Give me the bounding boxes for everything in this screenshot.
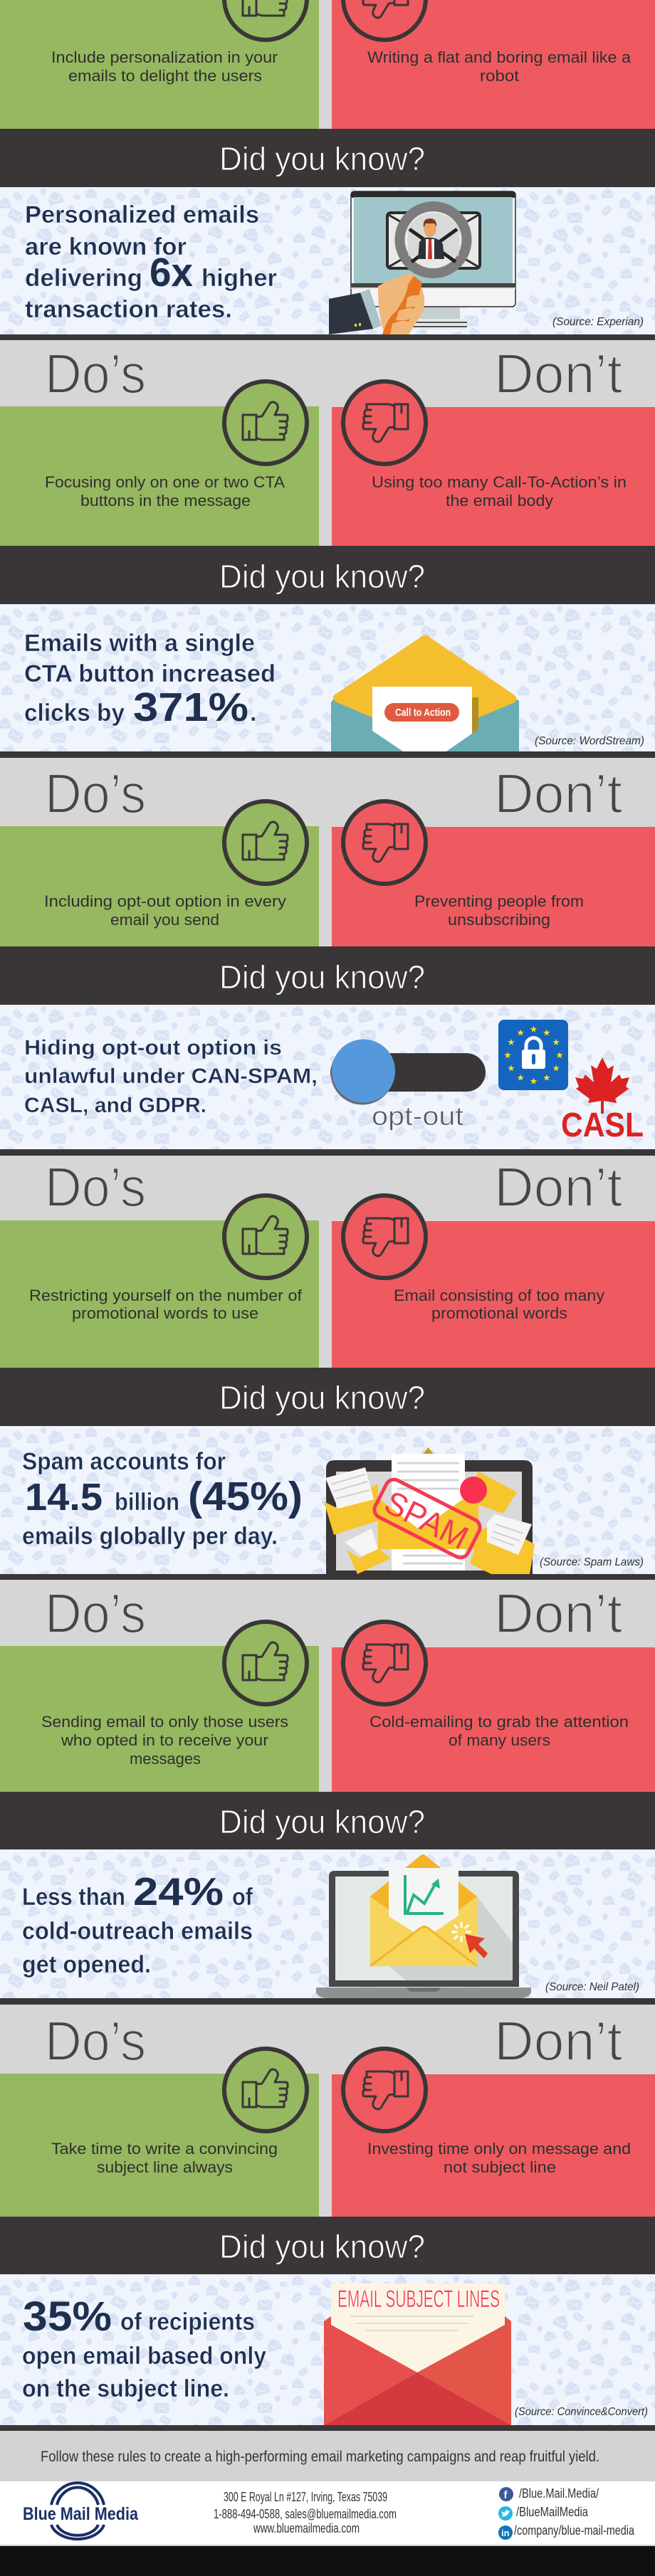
heading: do's: Do’s [45,1156,146,1218]
fact text: get opened. [22,1951,151,1978]
divider strip [0,751,655,758]
don't text [367,2140,631,2176]
icon: thumbs down [343,1195,426,1278]
fact text: Personalized emails [25,201,259,228]
don't text: robot [480,67,519,85]
heading bar: did you know 6: Did you know? [219,2228,425,2265]
icon: thumbs up [224,2049,307,2131]
heading bar: did you know 5 [0,1792,655,1849]
do text [45,473,285,510]
source: (Source: Experian) [552,316,644,328]
heading bar: did you know 5: Did you know? [219,1803,425,1840]
fact text: billion [115,1489,179,1516]
fact text: 371% [133,685,248,730]
divider strip [0,2425,655,2431]
fact text [22,1448,303,1550]
panel: personalized emails fact [0,187,655,334]
illustration: laptop with open envelope [316,1854,531,1998]
don't text: Email consisting of too many [394,1287,604,1304]
fact text: 14.5 [25,1476,103,1519]
social: linkedin: in [501,2528,510,2538]
fact text: 35% [23,2293,112,2340]
contact details: www.bluemailmedia.com [253,2521,360,2535]
heading: don't: Don’t [494,1156,622,1218]
fact text: clicks by [24,700,125,727]
icon: thumbs down [343,2049,426,2131]
fact text: on the subject line. [22,2375,229,2402]
heading bar: did you know 1: Did you know? [219,140,425,177]
icon: thumbs down [343,381,426,464]
fact text [25,201,277,323]
illustration: monitor with magnifier [329,191,515,334]
icon: thumbs up [224,1622,307,1704]
heading: do's: Do’s [45,342,146,405]
don't text [414,892,584,929]
do text: Including opt-out option in every [44,892,286,910]
fact text: of recipients [120,2308,255,2335]
divider strip [0,1149,655,1156]
logo: Blue Mail Media [23,2483,139,2539]
illustration: red envelope with subject lines [324,2284,511,2425]
panel: do's and don'ts 2 [0,758,655,946]
divider strip [0,1574,655,1580]
heading bar: did you know 4: Did you know? [219,1379,425,1416]
do text [51,48,278,85]
do text: Restricting yourself on the number of [29,1287,303,1304]
fact text: higher [201,265,277,292]
do text: Include personalization in your [51,48,278,66]
fact text: CASL, and GDPR. [24,1094,206,1117]
don't text: Writing a flat and boring email like a [367,48,632,66]
panel: do's and don'ts 5 [0,2005,655,2217]
don't text [370,1713,629,1749]
heading: do's: Do’s [45,762,146,825]
contact details: 300 E Royal Ln #127, Irving, Texas 75039 [224,2490,387,2504]
heading bar: did you know 3 [0,946,655,1005]
do text [41,1713,288,1768]
heading bar: did you know 2: Did you know? [219,558,425,595]
social: facebook: f [504,2489,508,2501]
icon: EU lock [498,1020,568,1090]
fact text: Spam accounts for [22,1448,226,1475]
panel: spam fact [0,1426,655,1574]
don't text [367,48,632,85]
panel: do's and don'ts 1 [0,340,655,546]
button: call to action [384,703,459,722]
don't text: Preventing people from [414,892,584,910]
social: facebook: /Blue.Mail.Media/ [519,2486,599,2501]
do text [29,1287,303,1322]
heading bar: did you know 2 [0,546,655,604]
heading: don't: Don’t [494,1582,622,1645]
fact text: of [232,1884,253,1911]
social: twitter [498,2505,589,2520]
do text: emails to delight the users [68,67,262,85]
fact text: Less than [22,1884,125,1911]
fact text: emails globally per day. [22,1523,278,1550]
icon: thumbs up [224,381,307,464]
heading: do's: Do’s [45,1582,146,1645]
panel: do's and don'ts 4 [0,1580,655,1792]
panel: subject line fact [0,2274,655,2425]
icon: toggle switch [330,1039,486,1104]
fact text: 6x [150,250,193,295]
fact text: CTA button increased [24,660,276,687]
social: twitter: /BlueMailMedia [516,2505,589,2519]
panel: opt-out fact [0,1005,655,1149]
fact text: open email based only [22,2343,266,2370]
fact text [22,2293,266,2402]
panel: do's and don'ts 3 [0,1156,655,1368]
divider strip [0,334,655,340]
fact text: cold-outreach emails [22,1918,253,1945]
don't text: of many users [449,1731,550,1749]
do text: buttons in the message [80,492,251,510]
social: facebook [499,2486,599,2501]
heading: don't: Don’t [494,2010,622,2072]
fact text: 24% [133,1869,224,1913]
don't text: Using too many Call-To-Action’s in [372,473,627,491]
don't text: Cold-emailing to grab the attention [370,1713,629,1731]
do text: messages [130,1750,201,1768]
heading bar: did you know 1 [0,129,655,187]
source: (Source: WordStream) [535,735,644,747]
icon: CASL maple leaf [561,1057,644,1144]
fact text: transaction rates. [25,296,232,323]
social: linkedin [498,2523,635,2540]
don't text [372,473,627,510]
do text: who opted in to receive your [61,1731,268,1749]
fact text: unlawful under CAN-SPAM, [24,1065,318,1088]
do text: Sending email to only those users [41,1713,288,1731]
fact text: Hiding opt-out option is [24,1036,282,1060]
icon: thumbs down [343,1622,426,1704]
panel: single CTA fact [0,604,655,751]
don't text: unsubscribing [448,911,550,929]
source: (Source: Spam Laws) [540,1556,644,1568]
panel: footer [0,2481,655,2546]
fact text: delivering [25,265,142,292]
don't text: Investing time only on message and [367,2140,631,2158]
panel: cold outreach fact [0,1849,655,1998]
icon: CASL maple leaf: CASL [561,1107,644,1144]
icon: thumbs up [224,801,307,884]
don't text: not subject line [444,2158,556,2176]
heading: do's: Do’s [45,2010,146,2072]
do text: Focusing only on one or two CTA [45,473,285,491]
logo: Blue Mail Media: Blue Mail Media [23,2504,139,2524]
heading bar: did you know 6 [0,2217,655,2274]
icon: thumbs down [343,0,426,40]
illustration: laptop with spam envelopes [324,1447,535,1574]
label: opt-out: opt-out [372,1102,464,1131]
fact text: (45%) [188,1474,303,1519]
do text [51,2140,278,2176]
icon: thumbs up [224,1195,307,1278]
don't text: promotional words [431,1304,567,1322]
panel: do's and don'ts 0 (cropped top) [0,0,655,129]
source: (Source: Neil Patel) [545,1981,639,1993]
stamp: SPAM: SPAM [379,1483,474,1556]
do text: promotional words to use [72,1304,258,1322]
fact text: Emails with a single [24,630,255,657]
heading bar: did you know 3: Did you know? [219,959,425,996]
don't text [394,1287,604,1322]
icon: thumbs up [224,0,307,40]
fact text [22,1869,253,1978]
fact text: are known for [25,233,187,260]
heading: don't: Don’t [494,342,622,405]
do text [44,892,286,929]
illustration: envelope with call to action [331,635,519,751]
heading: don't: Don’t [494,762,622,825]
fact text [24,630,276,730]
do text: subject line always [97,2158,233,2176]
panel: closing note [0,2431,655,2481]
contact details: 1-888-494-0588, sales@bluemailmedia.com [214,2507,397,2521]
divider strip [0,1998,655,2005]
contact details [214,2490,397,2535]
don't text: the email body [446,492,553,510]
do text: email you send [110,911,219,929]
heading bar: did you know 4 [0,1368,655,1426]
button: call to action: Call to Action [395,707,451,719]
do text: Take time to write a convincing [51,2140,278,2158]
fact text: . [250,700,256,727]
icon: thumbs down [343,801,426,884]
fact text [24,1036,318,1117]
label: email subject lines: EMAIL SUBJECT LINES [337,2286,500,2313]
